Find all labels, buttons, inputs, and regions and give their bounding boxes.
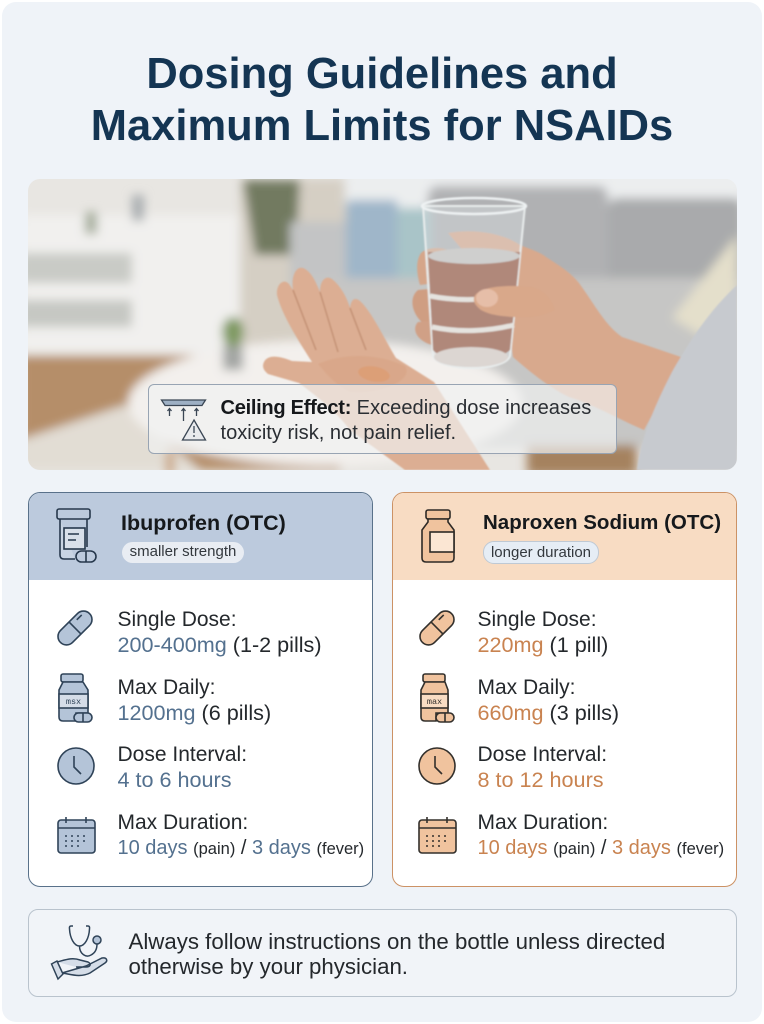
- title: Dosing Guidelines and: [146, 50, 618, 98]
- row: dose interval: [57, 743, 247, 792]
- text: max daily: [478, 676, 619, 725]
- icon: capsule: [57, 610, 93, 646]
- text: max duration: Max Duration:: [478, 811, 608, 834]
- text: max daily: 1200mg (6 pills): [118, 700, 271, 725]
- footer text: otherwise by your physician.: [128, 954, 408, 979]
- icon: ceiling with arrows and warning triangle: [160, 399, 207, 441]
- footer text: [128, 929, 665, 979]
- footer note: [28, 909, 737, 997]
- icon: calendar: [418, 817, 457, 854]
- text: dose interval: 4 to 6 hours: [118, 767, 232, 792]
- text: single dose: [118, 608, 322, 657]
- right hand holding glass: [448, 231, 681, 430]
- pill: [358, 366, 390, 382]
- icon: capsule: [419, 610, 455, 646]
- text: dose interval: Dose Interval:: [118, 743, 247, 766]
- text: single dose: Single Dose:: [478, 608, 597, 631]
- tag: longer duration: longer duration: [491, 544, 591, 561]
- glass: [423, 206, 525, 368]
- icon: max bottle: [420, 673, 455, 723]
- callout: ceiling effect: [148, 384, 617, 454]
- tag: longer duration: [483, 541, 599, 564]
- callout text: toxicity risk, not pain relief.: [220, 422, 456, 444]
- left hand with pill: [263, 268, 490, 470]
- tag: smaller strength: smaller strength: [130, 543, 236, 560]
- sleeve: [637, 285, 737, 470]
- text: single dose: Single Dose:: [118, 608, 237, 631]
- title: Maximum Limits for NSAIDs: [91, 102, 673, 150]
- text: max duration: [478, 811, 724, 859]
- icon: msx bottle: msx: [66, 697, 81, 707]
- text: max daily: Max Daily:: [118, 676, 216, 699]
- panel: ibuprofen: [28, 492, 373, 887]
- text: dose interval: [478, 743, 607, 792]
- naproxen name: Naproxen Sodium (OTC): [483, 511, 721, 534]
- panel: naproxen sodium: [392, 492, 737, 887]
- icon: hand with stethoscope: [50, 925, 108, 980]
- row: single dose: [57, 608, 322, 657]
- text: single dose: 200-400mg (1-2 pills): [118, 632, 322, 657]
- icon: calendar: [57, 817, 96, 854]
- text: dose interval: Dose Interval:: [478, 743, 607, 766]
- row: max duration: [418, 811, 724, 859]
- ibuprofen header: [29, 493, 372, 580]
- text: max duration: [118, 811, 364, 859]
- row: dose interval: [418, 743, 607, 792]
- icon: clock: [418, 747, 456, 785]
- icon: clock: [57, 747, 95, 785]
- icon: bottle: [421, 509, 455, 563]
- text: max duration: 10 days (pain) / 3 days (fever): [478, 837, 724, 859]
- text: max duration: Max Duration:: [118, 811, 248, 834]
- row: max daily: [58, 673, 271, 725]
- text: dose interval: 8 to 12 hours: [478, 767, 604, 792]
- text: max duration: 10 days (pain) / 3 days (fever): [118, 837, 364, 859]
- row: max daily: [420, 673, 619, 725]
- icon: msx bottle: [58, 673, 93, 723]
- row: max duration: [57, 811, 364, 859]
- text: single dose: 220mg (1 pill): [478, 632, 608, 657]
- text: dose interval: [118, 743, 247, 792]
- row: single dose: [419, 608, 608, 657]
- text: max daily: [118, 676, 271, 725]
- callout text: [220, 397, 591, 444]
- photo: hands holding a pill and a glass of water: [28, 179, 737, 470]
- text: single dose: [478, 608, 608, 657]
- footer text: Always follow instructions on the bottle unless directed: [128, 929, 665, 954]
- icon: prescription bottle: [56, 508, 97, 563]
- ibuprofen name: Ibuprofen (OTC): [121, 511, 286, 535]
- thumb: [473, 285, 520, 318]
- title: [91, 50, 673, 150]
- naproxen header: [393, 493, 736, 580]
- text: max daily: 660mg (3 pills): [478, 700, 619, 725]
- icon: max bottle: max: [427, 697, 442, 707]
- text: max daily: Max Daily:: [478, 676, 576, 699]
- callout text: Ceiling Effect: Exceeding dose increases: [220, 397, 591, 419]
